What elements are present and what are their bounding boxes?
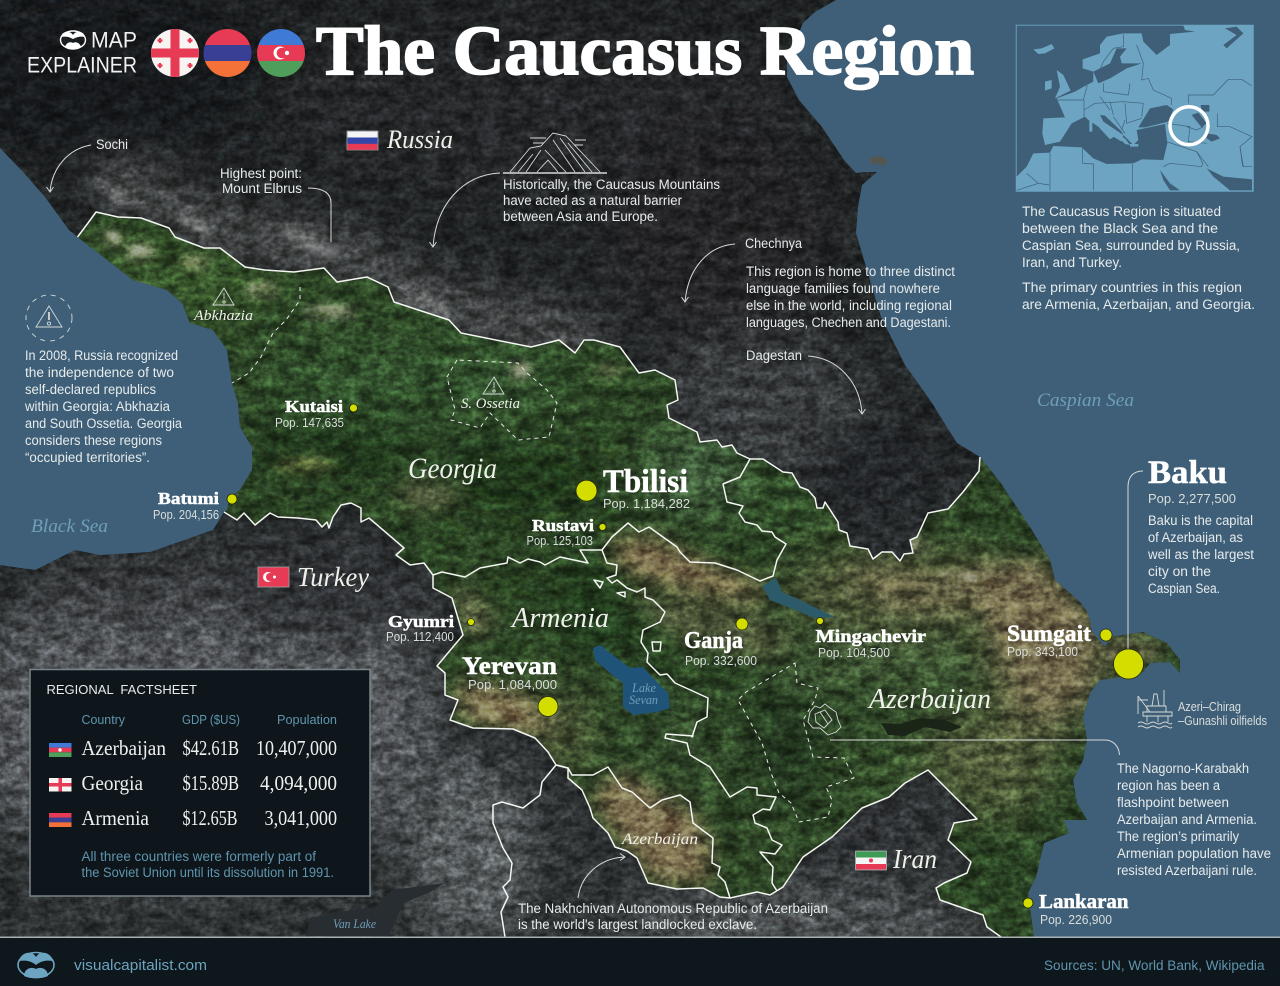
label: Iran with flag [856, 844, 937, 874]
lake: Van [306, 883, 445, 936]
icon: oil platform [1138, 690, 1172, 728]
text: Nakhchivan note with arrow: The Nakhchivan Autonomous Republic of Azerbaijan [518, 901, 828, 916]
label: Caspian Sea: Caspian Sea [1037, 390, 1134, 411]
city: Tbilisi [576, 464, 690, 511]
label: Armenia: Armenia [510, 603, 609, 634]
table row: Armenia: 3,041,000 [264, 806, 337, 830]
label: Lake Sevan [629, 681, 658, 707]
label: Azeri-Chirag-Gunashli oilfields: Azeri–Chirag [1178, 700, 1241, 714]
label: Abkhazia with warning icon [193, 288, 253, 324]
factsheet note: All three countries were formerly part of [82, 849, 316, 864]
text: recognition note: “occupied territories”. [25, 450, 150, 465]
label: Abkhazia with warning icon: Abkhazia [193, 308, 253, 324]
label: Turkey with flag: Turkey [297, 562, 369, 592]
national borders [78, 212, 1001, 937]
city: Lankaran: Lankaran [1039, 891, 1128, 913]
label: Lake Sevan: Lake [631, 681, 656, 695]
city: Mingachevir: Mingachevir [816, 626, 926, 646]
table header row: GDP ($US) [182, 713, 240, 727]
city: Rustavi: Rustavi [532, 516, 594, 535]
text: sources: Sources: UN, World Bank, Wikipedia [1044, 958, 1265, 973]
table row: Georgia: $15.89B [182, 771, 239, 795]
text: recognition note: within Georgia: Abkhazia [24, 399, 170, 414]
city: Sumgait [1007, 621, 1112, 659]
city: Kutaisi [275, 397, 358, 430]
disputed region outlines [232, 287, 854, 822]
text: Caucasus Mountains note with arrow: Historically, the Caucasus Mountains [503, 177, 720, 192]
city: Baku with note: Baku is the capital [1148, 513, 1253, 528]
label: Russia with flag [347, 125, 453, 154]
city: Lankaran [1023, 891, 1128, 927]
city: Ganja: Ganja [684, 628, 743, 654]
text: recognition note: and South Ossetia. Georgia [25, 416, 182, 431]
label: Azerbaijan: Azerbaijan [867, 684, 991, 715]
panel: regional factsheet [30, 670, 370, 896]
text: recognition note: In 2008, Russia recognized [25, 348, 178, 363]
label: Dagestan with arrow [746, 348, 866, 414]
lake: Sevan [593, 645, 670, 715]
label: Sochi with arrow: Sochi [96, 137, 128, 152]
city: Kutaisi: Kutaisi [285, 397, 343, 416]
callout: Nagorno-Karabakh note [830, 740, 1271, 878]
city: Baku with note: of Azerbaijan, as [1148, 530, 1243, 545]
text: Chechnya note with arrow: languages, Chechen and Dagestani. [746, 315, 951, 330]
table row: Armenia: Armenia [82, 806, 150, 830]
table row: Armenia [49, 806, 337, 830]
text: Chechnya note with arrow [682, 236, 955, 330]
table row: Azerbaijan [49, 736, 337, 760]
callout: Nagorno-Karabakh note: Armenian population have [1117, 846, 1271, 861]
city: Baku with note: Baku [1148, 455, 1227, 491]
city: Tbilisi: Pop. 1,184,282 [603, 497, 690, 511]
lake: Azerbaijan dark patch [881, 718, 962, 736]
text: region intro: The primary countries in this region [1022, 280, 1242, 295]
label: Russia with flag: Russia [386, 125, 453, 154]
label: Dagestan with arrow: Dagestan [746, 348, 802, 363]
footer [0, 936, 1280, 986]
city: Kutaisi: Pop. 147,635 [275, 416, 344, 430]
text: Nakhchivan note with arrow [518, 854, 828, 932]
callout: Nagorno-Karabakh note: The Nagorno-Karabakh [1117, 761, 1249, 776]
text: MAP: MAP [91, 28, 137, 52]
city: Gyumri [386, 612, 474, 644]
city: Ganja: Pop. 332,600 [685, 654, 757, 668]
label: Sochi with arrow [46, 137, 128, 192]
table row: Georgia [49, 771, 337, 795]
label: Georgia: Georgia [408, 452, 497, 485]
text: recognition note [24, 348, 182, 465]
city: Batumi: Pop. 204,156 [153, 508, 219, 522]
city: Tbilisi: Tbilisi [603, 464, 688, 500]
city: Rustavi: Pop. 125,103 [526, 534, 593, 548]
label: Van Lake: Van Lake [333, 917, 376, 931]
text: region intro: The Caucasus Region is situated [1022, 204, 1221, 219]
label: Azeri-Chirag-Gunashli oilfields: –Gunashli oilfields [1178, 714, 1267, 728]
label: Black Sea: Black Sea [31, 516, 108, 537]
icon: mountain [503, 133, 607, 173]
city: Rustavi [526, 516, 606, 548]
city: Batumi: Batumi [158, 489, 219, 508]
icon: raised fist [808, 704, 841, 735]
city: Lankaran: Pop. 226,900 [1040, 913, 1112, 927]
text: region intro: between the Black Sea and the [1022, 221, 1218, 236]
table row: Azerbaijan: $42.61B [182, 736, 239, 760]
factsheet note [82, 849, 334, 880]
text: EXPLAINER: EXPLAINER [27, 52, 137, 78]
label: Mount Elbrus: Highest point: [220, 166, 302, 181]
flag circle: Georgia [151, 29, 199, 77]
callout: Nagorno-Karabakh note: resisted Azerbaijani rule. [1117, 863, 1257, 878]
table row: Georgia: Georgia [82, 771, 144, 795]
city: Gyumri: Pop. 112,400 [386, 630, 454, 644]
city: Yerevan: Yerevan [462, 653, 557, 680]
label: Turkey with flag [258, 562, 369, 592]
text: Caucasus Mountains note with arrow [430, 173, 720, 247]
label: Mount Elbrus: Mount Elbrus [222, 181, 302, 196]
heading: regional factsheet: REGIONAL FACTSHEET [46, 683, 197, 697]
city: Baku with note: Caspian Sea. [1148, 581, 1220, 596]
text: recognition note: the independence of two [25, 365, 174, 380]
flag circle: Azerbaijan [257, 29, 305, 77]
text: Nakhchivan note with arrow: is the world's largest landlocked exclave. [518, 917, 757, 932]
text: recognition note: self-declared republics [25, 382, 156, 397]
callout: Nagorno-Karabakh note: The region’s primarily [1117, 829, 1239, 844]
city: Sumgait: Pop. 343,100 [1007, 645, 1078, 659]
Caspian Sea [787, 0, 1280, 937]
lake: Mingachevir reservoir [762, 578, 835, 618]
table row: Azerbaijan: Azerbaijan [82, 736, 166, 760]
city: Baku with note: city on the [1148, 564, 1211, 579]
factsheet note: the Soviet Union until its dissolution in 1991. [82, 865, 334, 880]
table row: Azerbaijan: 10,407,000 [256, 736, 337, 760]
city: Mingachevir [816, 618, 926, 660]
inset locator map [1016, 26, 1253, 191]
callout: Nagorno-Karabakh note: region has been a [1117, 778, 1220, 793]
logo: Map Explainer [27, 28, 137, 78]
callout: Nagorno-Karabakh note: flashpoint between [1117, 795, 1229, 810]
map: Georgia, Armenia and Azerbaijan terrain [78, 213, 1180, 936]
city: Baku with note [1114, 455, 1254, 679]
city: Yerevan: Pop. 1,084,000 [468, 678, 557, 692]
text: region intro [1022, 204, 1255, 312]
text: website: visualcapitalist.com [74, 958, 207, 974]
text: Chechnya note with arrow: else in the world, including regional [746, 298, 952, 313]
city: Gyumri: Gyumri [388, 612, 454, 631]
text: Caucasus Mountains note with arrow: between Asia and Europe. [503, 209, 658, 224]
city: Mingachevir: Pop. 104,500 [818, 646, 890, 660]
city: Ganja [684, 618, 757, 668]
city: Yerevan [462, 653, 558, 716]
table row: Georgia: 4,094,000 [260, 771, 337, 795]
text: region intro: Iran, and Turkey. [1022, 255, 1122, 270]
city: Baku with note: well as the largest [1147, 547, 1254, 562]
logo: Visual Capitalist [18, 952, 54, 978]
city: Baku with note: Pop. 2,277,500 [1148, 492, 1236, 506]
label: Azerbaijan exclave: Azerbaijan [621, 831, 698, 848]
table header row [82, 713, 337, 727]
label: Iran with flag: Iran [892, 844, 937, 874]
icon: Map Explainer globe mark [60, 31, 86, 49]
city: Batumi [153, 489, 237, 522]
callout: Nagorno-Karabakh note: Azerbaijan and Armenia. [1117, 812, 1257, 827]
Caspian islet [869, 156, 888, 166]
text: Caucasus Mountains note with arrow: have acted as a natural barrier [503, 193, 682, 208]
label: Lake Sevan: Sevan [629, 693, 658, 707]
flag circle: Armenia [203, 29, 252, 77]
text: Chechnya note with arrow: language families found nowhere [746, 281, 940, 296]
table header row: Population [277, 713, 337, 727]
city: Sumgait: Sumgait [1007, 621, 1091, 646]
text: recognition note: considers these regions [25, 433, 162, 448]
label: Mount Elbrus [220, 166, 339, 258]
text: region intro: Caspian Sea, surrounded by Russia, [1022, 238, 1240, 253]
text: Chechnya note with arrow: Chechnya [745, 236, 802, 251]
icon: warning in dashed circle [26, 295, 72, 341]
locator ring [1170, 107, 1208, 145]
Black Sea [0, 148, 252, 570]
text: region intro: are Armenia, Azerbaijan, and Georgia. [1022, 297, 1255, 312]
table header row: Country [82, 713, 126, 727]
label: Azeri-Chirag-Gunashli oilfields [1178, 700, 1267, 728]
title: The Caucasus Region [316, 13, 974, 90]
text: Chechnya note with arrow: This region is home to three distinct [746, 264, 955, 279]
label: S. Ossetia with warning icon: S. Ossetia [461, 396, 520, 412]
table row: Armenia: $12.65B [182, 806, 238, 830]
label: S. Ossetia with warning icon [461, 377, 520, 412]
